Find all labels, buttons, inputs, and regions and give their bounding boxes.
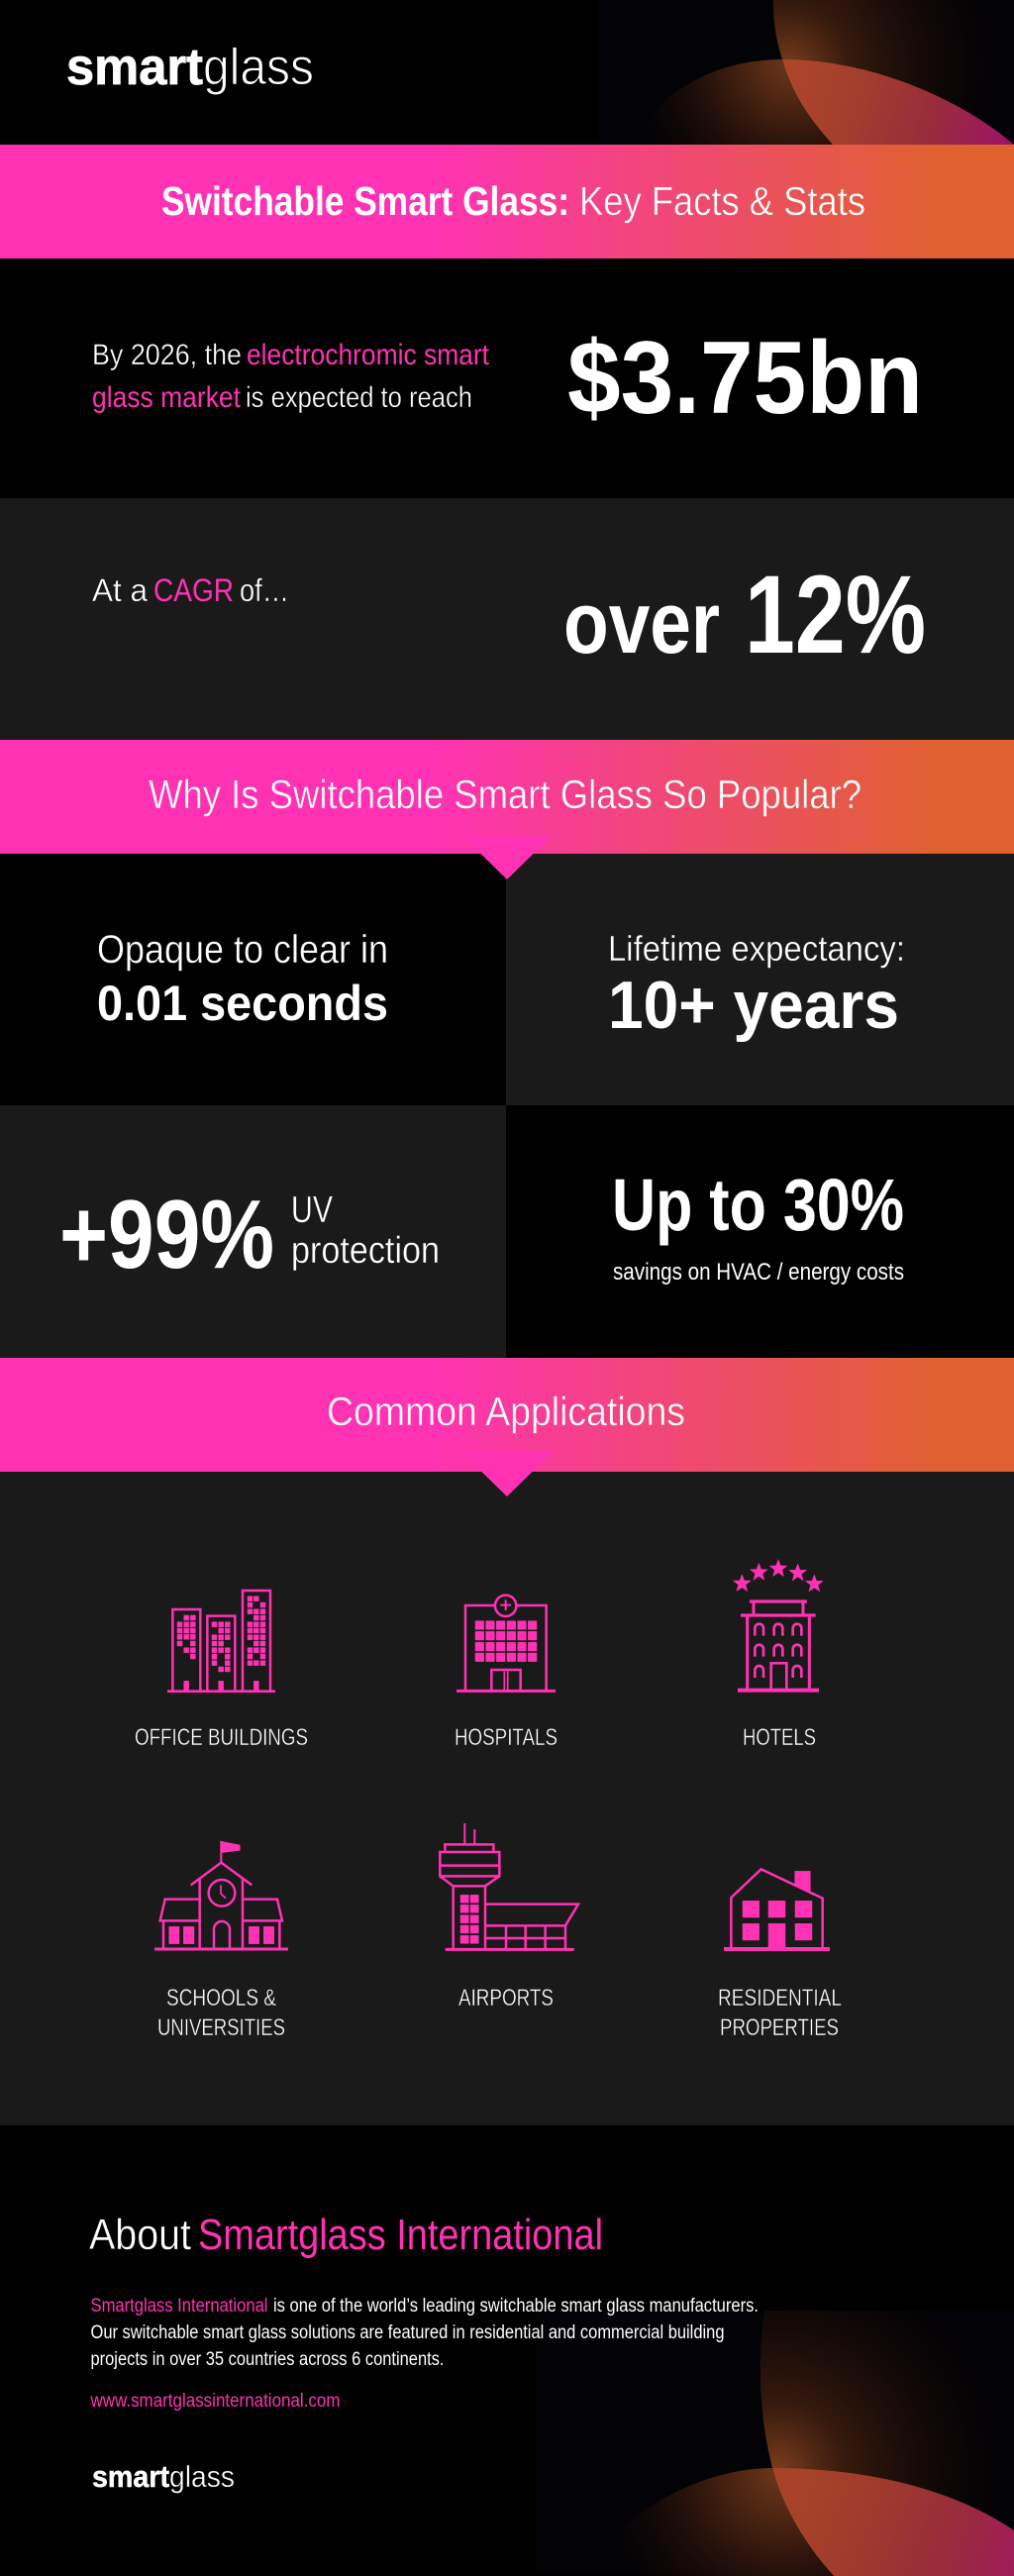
panel: UV protection: +99% <box>59 1180 274 1288</box>
icon: schools and universities <box>154 1841 288 1949</box>
icon: airports <box>440 1823 578 1949</box>
market size text: electrochromic smart <box>247 339 490 371</box>
logo: footer: glass <box>169 2459 235 2494</box>
icon: hospitals <box>456 1596 556 1691</box>
about paragraph: projects in over 35 countries across 6 continents. <box>91 2349 444 2370</box>
logo: header: glass <box>203 39 314 96</box>
title banner <box>0 145 1014 258</box>
footer panel <box>89 2211 1014 2576</box>
header panel <box>66 0 1014 145</box>
about heading <box>89 2211 603 2259</box>
CAGR text: of… <box>240 572 289 608</box>
icon: hotels <box>733 1560 823 1691</box>
logo: footer: smart <box>92 2459 169 2494</box>
panel: lifetime: Lifetime expectancy: <box>608 928 905 969</box>
stat: over 12% <box>563 553 926 676</box>
panel: applications <box>0 1358 1014 2125</box>
panel: lifetime <box>506 854 1014 1105</box>
about paragraph: Smartglass International <box>91 2296 267 2317</box>
logo: footer <box>92 2459 235 2494</box>
panel: UV protection <box>0 1105 506 1358</box>
panel: HVAC savings: Up to 30% <box>612 1164 904 1246</box>
logo: header <box>66 39 314 96</box>
label: airports: AIRPORTS <box>458 1985 554 2011</box>
about heading: Smartglass International <box>198 2211 603 2259</box>
label: schools and universities <box>157 1985 285 2041</box>
label: hotels: HOTELS <box>743 1724 816 1751</box>
icon: residential properties <box>724 1869 830 1949</box>
market size text <box>92 339 490 414</box>
panel: opaque to clear <box>0 854 506 1105</box>
title banner: Switchable Smart Glass: <box>161 178 569 224</box>
logo: header: smart <box>66 39 203 96</box>
banner: common applications <box>0 1358 1014 1496</box>
label: residential properties: PROPERTIES <box>720 2014 839 2041</box>
CAGR text: CAGR <box>153 572 234 608</box>
panel: market size <box>0 258 1014 498</box>
CAGR text <box>92 572 289 608</box>
stat: $3.75bn: $3.75bn <box>567 321 923 436</box>
label: residential properties <box>718 1985 842 2041</box>
label: hospitals: HOSPITALS <box>455 1724 558 1751</box>
market size text: glass market <box>92 381 242 414</box>
market size text: By 2026, the <box>92 339 242 371</box>
about paragraph: is one of the world’s leading switchable smart glass manufacturers. <box>273 2296 759 2317</box>
panel: HVAC savings: savings on HVAC / energy costs <box>613 1259 904 1286</box>
about paragraph: Our switchable smart glass solutions are featured in residential and commercial building <box>91 2322 725 2343</box>
panel: UV protection: UV <box>291 1189 334 1231</box>
market size text: is expected to reach <box>246 381 472 414</box>
stat: over 12%: over <box>563 573 720 671</box>
about paragraph <box>91 2296 759 2370</box>
panel: UV protection: protection <box>291 1230 440 1272</box>
stat: over 12%: 12% <box>745 553 926 676</box>
about heading: About <box>89 2211 191 2259</box>
CAGR text: At a <box>92 572 148 608</box>
label: schools and universities: SCHOOLS & <box>166 1985 276 2011</box>
icon: office buildings <box>167 1591 275 1692</box>
label: office buildings: OFFICE BUILDINGS <box>135 1724 308 1751</box>
banner: why popular <box>0 740 1014 879</box>
label: residential properties: RESIDENTIAL <box>718 1985 842 2011</box>
panel: CAGR <box>0 498 1014 740</box>
label: schools and universities: UNIVERSITIES <box>157 2014 285 2041</box>
panel: HVAC savings <box>506 1105 1014 1358</box>
banner: why popular: Why Is Switchable Smart Glass So Popular? <box>149 772 862 817</box>
website link: www.smartglassinternational.com <box>90 2391 341 2412</box>
title banner: Key Facts & Stats <box>579 178 865 224</box>
panel: opaque to clear: Opaque to clear in <box>97 928 388 972</box>
panel: opaque to clear: 0.01 seconds <box>97 976 388 1031</box>
banner: common applications: Common Applications <box>327 1389 685 1434</box>
panel: lifetime: 10+ years <box>608 968 899 1043</box>
